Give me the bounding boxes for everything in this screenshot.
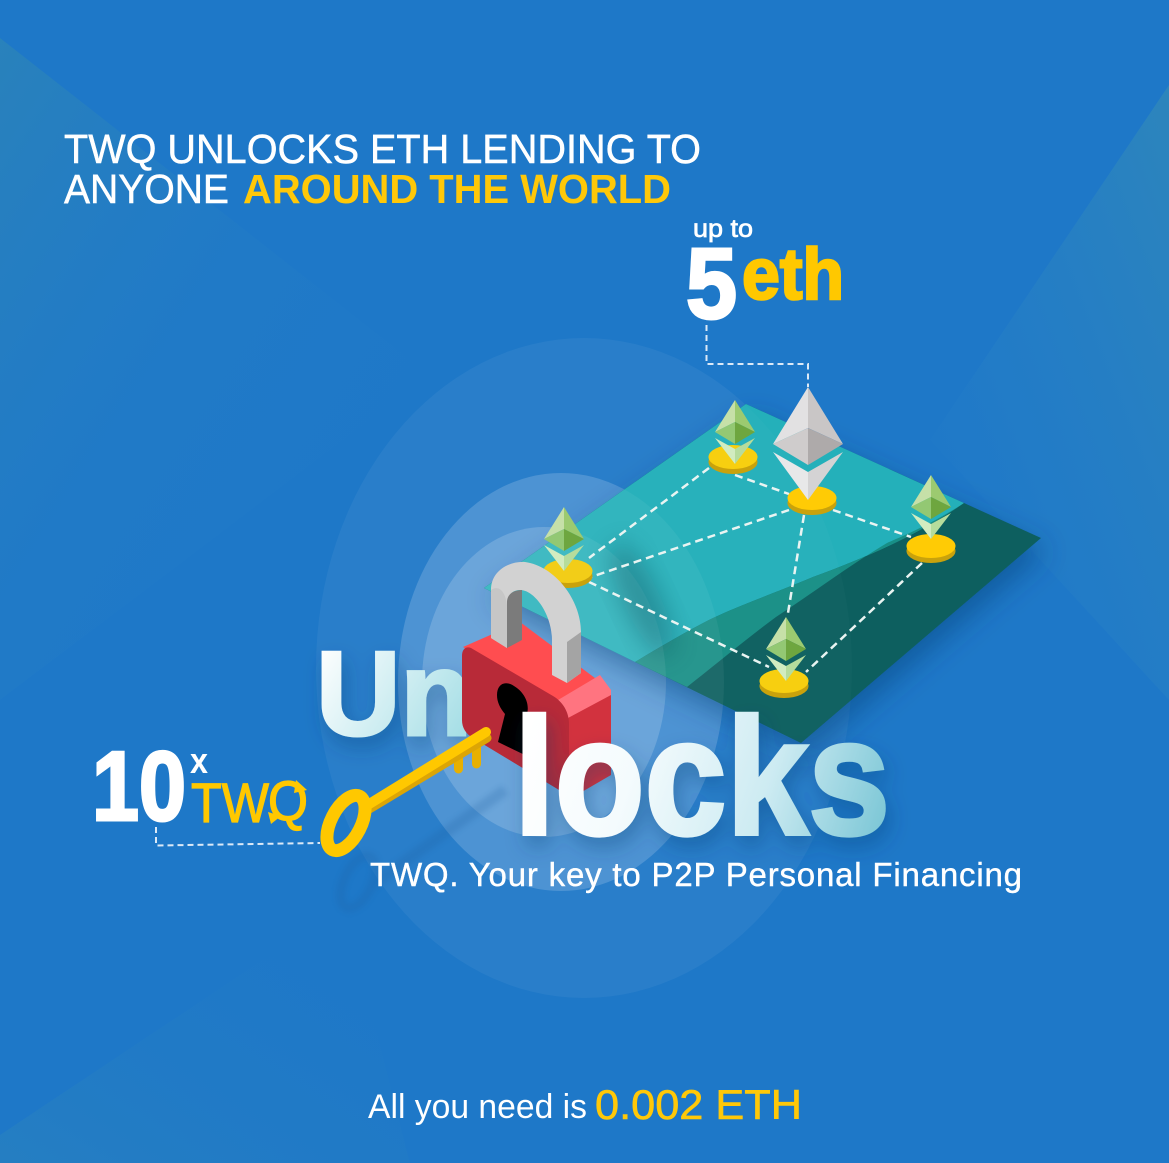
map platform [484,404,1045,760]
title word: locks: locks [514,685,890,870]
footer line: All you need is [368,1088,587,1126]
footer line [368,1081,802,1128]
padlock front face [462,647,569,796]
heading: TWQ UNLOCKS ETH LENDING TO [64,126,701,172]
icon: padlock [462,562,611,800]
padlock top face [463,622,611,712]
icon: small ethereum bottom [766,617,806,681]
title word: Un: Un [316,627,472,761]
tagline: TWQ. Your key to P2P Personal Financing [370,856,1022,893]
keyhole [497,683,529,757]
callout: 10x TWQ: x [190,740,208,781]
concentric glow ovals [316,338,852,998]
callout: 10x TWQ: Q [268,769,308,832]
coin: center node [788,486,836,515]
padlock right face [568,695,611,800]
icon: golden key [319,732,487,857]
icon: large ethereum [773,387,843,500]
callout: up to 5 eth: up to [693,215,753,243]
icon: small ethereum left [544,507,584,571]
callout: 10x TWQ: 10 [92,731,186,841]
callout: up to 5 eth [686,215,844,387]
callout: up to 5 eth: eth [742,235,844,315]
callout: 10x TWQ [92,731,320,846]
coin: left node [544,559,592,588]
heading: AROUND THE WORLD [243,166,671,212]
icon: small ethereum right [911,475,951,539]
coin: top left node [708,445,758,474]
callout: up to 5 eth: 5 [686,228,737,340]
coin: right node [906,534,956,563]
heading: ANYONE [64,166,229,212]
padlock shackle [491,562,581,683]
coin: bottom node [760,669,808,698]
network dashed links [589,468,922,672]
heading [64,126,701,212]
footer line: 0.002 ETH [595,1081,802,1128]
padlock lighter bevel [558,675,611,722]
faint key shadow [333,790,505,913]
icon: small ethereum top left [715,400,755,464]
callout: 10x TWQ: TW [191,771,269,834]
